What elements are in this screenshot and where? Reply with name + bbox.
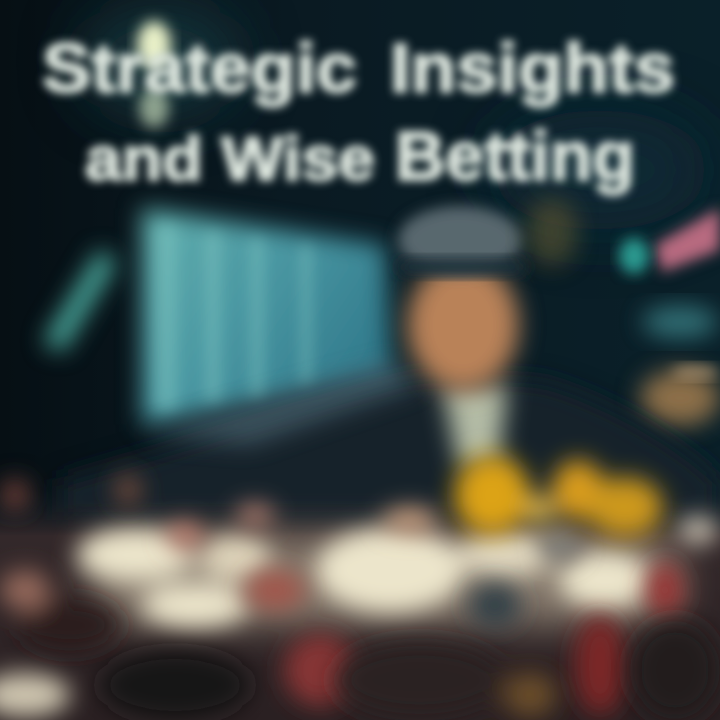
jacket [60, 375, 720, 520]
icon: glowing star [137, 21, 171, 128]
panel: teal data screen [142, 208, 392, 425]
left teal streak [44, 250, 116, 352]
face [407, 259, 519, 391]
sleeve highlight [140, 362, 420, 445]
gold coins [454, 455, 663, 537]
figure: businessman [60, 198, 720, 520]
title: and Wise [85, 125, 375, 194]
title: Betting [395, 117, 635, 195]
shirt [442, 385, 508, 465]
cap [398, 206, 522, 274]
title [42, 29, 675, 195]
right chart streaks [619, 208, 720, 426]
title: Insights [390, 29, 675, 107]
title: Strategic [42, 29, 357, 107]
background glow [80, 5, 710, 230]
hat ornament [526, 198, 578, 266]
crowd [0, 474, 720, 720]
